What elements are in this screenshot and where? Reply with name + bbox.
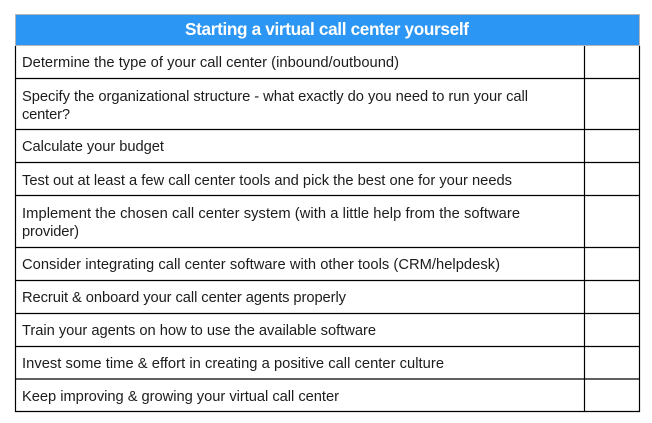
row 5 text <box>22 206 520 240</box>
table header <box>16 14 640 46</box>
table header: Starting a virtual call center yourself <box>185 19 469 39</box>
row 5 text: Implement the chosen call center system (with a little help from the software <box>22 206 520 222</box>
row 2 text: center? <box>22 107 70 123</box>
row 1 text: Determine the type of your call center (inbound/outbound) <box>22 55 399 71</box>
row 2 text: Specify the organizational structure - what exactly do you need to run your call <box>22 89 528 105</box>
row 10 text: Keep improving & growing your virtual call center <box>22 389 339 405</box>
row 7 text: Recruit & onboard your call center agents properly <box>22 290 347 306</box>
row 8 text: Train your agents on how to use the available software <box>22 323 376 339</box>
row 2 text <box>22 89 528 123</box>
row 4 text: Test out at least a few call center tools and pick the best one for your needs <box>22 173 512 189</box>
row 6 text: Consider integrating call center software with other tools (CRM/helpdesk) <box>22 257 500 273</box>
row 9 text: Invest some time & effort in creating a positive call center culture <box>22 356 444 372</box>
row 3 text: Calculate your budget <box>22 139 164 155</box>
row 5 text: provider) <box>22 224 79 240</box>
